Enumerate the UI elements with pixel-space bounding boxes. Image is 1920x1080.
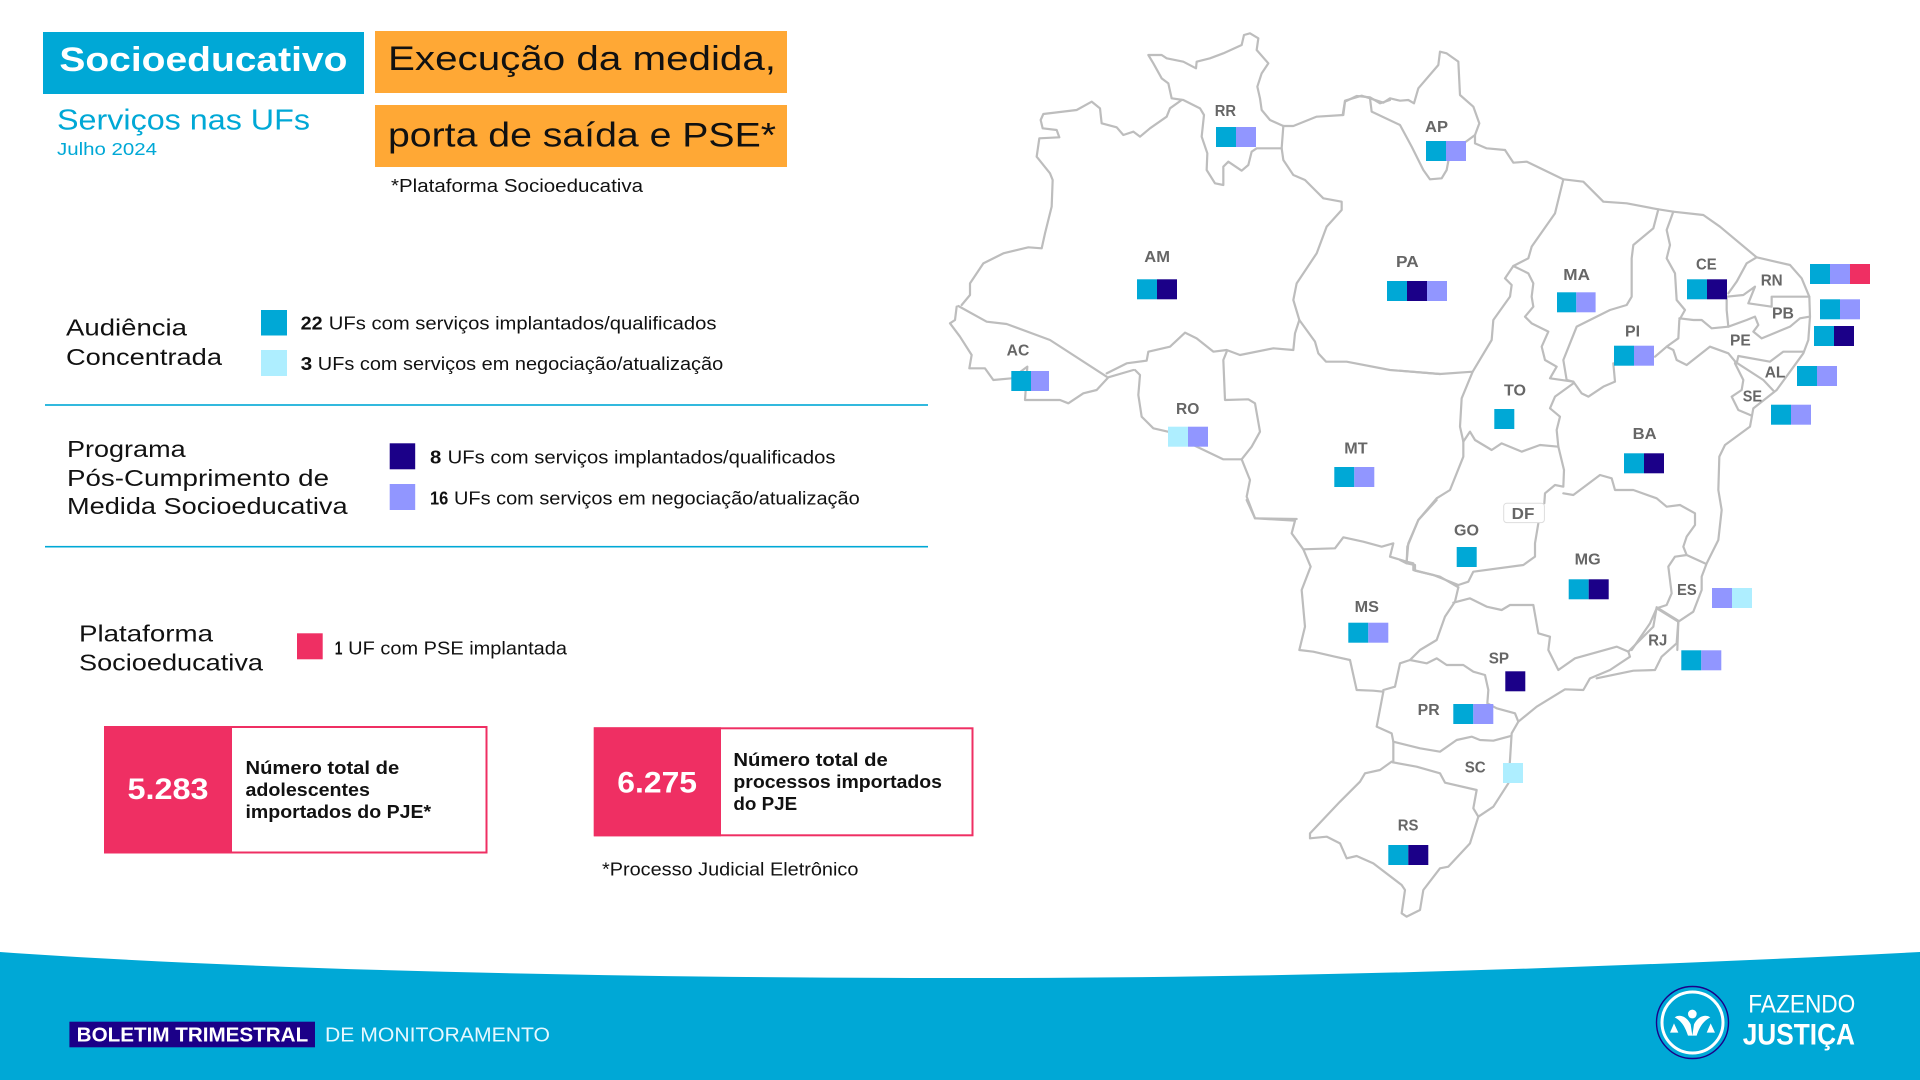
state AL: AL [1765, 364, 1785, 381]
subtitle: Serviços nas UFs: Serviços nas UFs [57, 104, 310, 136]
state PB: PB [1772, 305, 1794, 322]
state RS [1388, 817, 1428, 865]
state CE [1687, 256, 1727, 299]
state AP [1425, 119, 1466, 161]
state MG [1569, 551, 1609, 599]
state PI: PI [1625, 323, 1640, 340]
stat card: 6.275 processos: do PJE [733, 794, 797, 814]
legend panel: Programa Pós-Cumprimento: UFs com serviços em negociação/atualização [454, 488, 860, 508]
state DF: DF [1512, 506, 1534, 523]
state AP: AP [1425, 119, 1448, 136]
legend panel: Programa Pós-Cumprimento: Pós-Cumprimento de [67, 465, 329, 491]
legend panel: Plataforma Socioeducativa: 1 [335, 638, 342, 658]
state ES: ES [1677, 582, 1697, 599]
state BA: BA [1633, 426, 1657, 443]
footer band [0, 952, 1920, 1080]
state RN: RN [1761, 272, 1783, 289]
footer label: Boletim Trimestral de Monitoramento: DE MONITORAMENTO [325, 1025, 550, 1047]
header: title Socioeducativo [43, 32, 364, 94]
footer label: Boletim Trimestral de Monitoramento: BOLETIM TRIMESTRAL [77, 1025, 308, 1047]
legend panel: Programa Pós-Cumprimento: UFs com serviços implantados/qualificados [448, 447, 836, 467]
legend panel: Audiência Concentrada: UFs com serviços em negociação/atualização [318, 354, 723, 374]
footnote: Plataforma Socioeducativa: *Plataforma Socioeducativa [391, 176, 644, 196]
state RN [1761, 264, 1870, 289]
subtitle: Serviços nas UFs: Julho 2024 [57, 139, 157, 159]
state SE [1743, 389, 1811, 425]
stat card: 5.283 adolescentes: importados do PJE* [246, 802, 431, 822]
logo: Fazendo Justiça [1656, 986, 1855, 1058]
state SC: SC [1465, 759, 1486, 776]
legend panel: Plataforma Socioeducativa: UF com PSE implantada [348, 638, 568, 658]
state DF [1504, 503, 1544, 523]
state borders west [950, 33, 1440, 519]
subtitle: Serviços nas UFs [57, 104, 310, 159]
stat card: 6.275 processos [594, 727, 972, 836]
state PR [1418, 702, 1493, 724]
state BA [1624, 426, 1664, 473]
stat card: 5.283 adolescentes: 5.283 [128, 773, 208, 806]
state GO [1454, 522, 1479, 567]
heading: orange title line 2: porta de saída e PSE* [388, 117, 776, 155]
legend panel: Plataforma Socioeducativa: Plataforma [79, 621, 214, 647]
state SP: SP [1489, 651, 1509, 668]
legend panel: Plataforma Socioeducativa [79, 621, 568, 676]
state AL [1765, 364, 1837, 386]
state MS: MS [1355, 599, 1379, 616]
stat card: 6.275 processos: processos importados [733, 772, 942, 792]
state AM: AM [1144, 249, 1170, 266]
state ES [1677, 582, 1752, 608]
state RJ [1648, 633, 1721, 670]
legend panel: Plataforma Socioeducativa: Socioeducativa [79, 650, 264, 676]
legend panel: Programa Pós-Cumprimento: 16 [430, 488, 448, 508]
legend panel: Audiência Concentrada: UFs com serviços implantados/qualificados [329, 313, 716, 333]
legend panel: Programa Pós-Cumprimento [67, 436, 860, 519]
legend panel: Programa Pós-Cumprimento: Programa [67, 436, 187, 462]
stat card: 5.283 adolescentes: Número total de [246, 758, 399, 778]
state GO: GO [1454, 522, 1479, 539]
state borders northeast and center [1400, 150, 1810, 650]
state TO: TO [1504, 382, 1526, 399]
state AC [1007, 342, 1049, 391]
state MG: MG [1575, 551, 1601, 568]
stat card: 6.275 processos: 6.275 [617, 767, 697, 800]
stat card: 6.275 processos: Número total de [733, 750, 888, 770]
state SP [1489, 651, 1525, 691]
stat card: 5.283 adolescentes: adolescentes [246, 780, 370, 800]
legend panel: Audiência Concentrada: Concentrada [66, 344, 223, 370]
state borders south [1247, 500, 1678, 917]
state TO [1494, 382, 1526, 429]
state PE: PE [1730, 333, 1751, 350]
legend panel: Programa Pós-Cumprimento: 8 [430, 447, 441, 467]
heading: orange title line 2 [375, 105, 787, 167]
state MA: MA [1563, 267, 1590, 284]
state RR [1215, 103, 1256, 147]
state MS [1348, 599, 1388, 643]
footer label: Boletim Trimestral de Monitoramento [69, 1022, 550, 1047]
state RO: RO [1176, 401, 1199, 418]
state SC [1465, 759, 1523, 783]
heading: orange title line 1: Execução da medida, [388, 40, 776, 78]
state AM [1137, 249, 1177, 299]
state PA: PA [1396, 254, 1419, 271]
footnote: Processo Judicial Eletrônico: *Processo Judicial Eletrônico [602, 860, 858, 880]
legend panel: Audiência Concentrada: 22 [301, 313, 323, 333]
state borders Amapá [1343, 52, 1505, 179]
state MT [1334, 440, 1374, 487]
legend panel: Audiência Concentrada: Audiência [66, 315, 188, 341]
state PA [1387, 254, 1447, 301]
state PE [1730, 326, 1854, 350]
state MT: MT [1344, 440, 1368, 457]
state PB [1772, 299, 1860, 322]
state AC: AC [1007, 342, 1029, 359]
legend panel: Programa Pós-Cumprimento: Medida Socioeducativa [67, 493, 349, 519]
heading: orange title line 1 [375, 31, 787, 93]
state RJ: RJ [1648, 633, 1667, 650]
stat card: 5.283 adolescentes [104, 726, 486, 854]
header: title Socioeducativo: Socioeducativo [59, 41, 347, 79]
state SE: SE [1743, 389, 1762, 406]
logo: Fazendo Justiça: JUSTIÇA [1743, 1018, 1855, 1051]
state CE: CE [1696, 256, 1717, 273]
state RR: RR [1215, 103, 1236, 120]
legend panel: Audiência Concentrada: 3 [301, 354, 312, 374]
legend panel: Audiência Concentrada [66, 310, 723, 376]
state PI [1614, 323, 1654, 366]
state RO [1168, 401, 1208, 447]
state MA [1557, 267, 1596, 312]
map of Brazil [950, 33, 1870, 917]
logo: Fazendo Justiça: FAZENDO [1748, 990, 1855, 1018]
state RS: RS [1398, 817, 1418, 834]
state PR: PR [1418, 702, 1440, 719]
